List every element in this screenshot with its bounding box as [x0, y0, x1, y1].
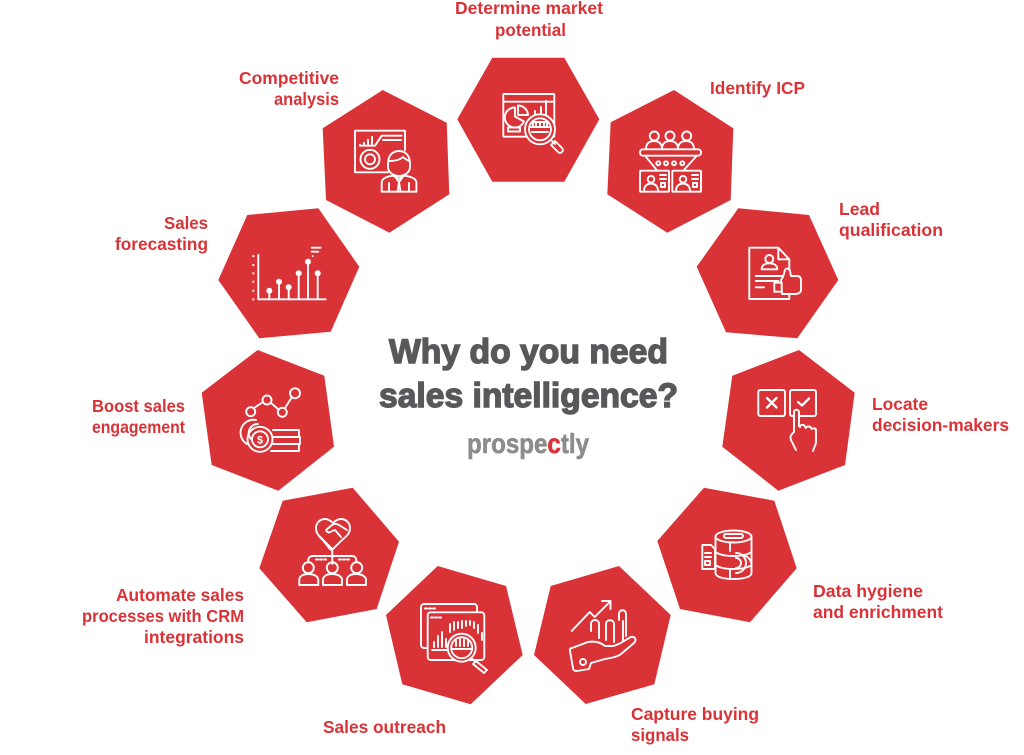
icon: hand with rising chart — [570, 601, 635, 671]
label: Identify ICP — [710, 78, 805, 98]
label: analysis — [274, 89, 339, 109]
label: integrations — [144, 627, 244, 647]
icon: document with thumbs up — [749, 248, 801, 299]
label: processes with CRM — [82, 606, 244, 626]
title — [379, 333, 678, 415]
icon: lollipop chart — [253, 248, 326, 299]
label — [813, 581, 943, 622]
label: and enrichment — [813, 602, 943, 622]
label — [631, 704, 759, 745]
label: dollar sign: $ — [257, 434, 263, 446]
hexagon — [607, 90, 733, 233]
label: Locate — [872, 394, 928, 414]
panel: Boost sales engagement — [92, 350, 334, 491]
icon: funnel with people — [640, 132, 701, 192]
label: decision-makers — [872, 415, 1009, 435]
label: signals — [631, 725, 689, 745]
hexagon — [534, 566, 671, 704]
hexagon — [259, 488, 399, 622]
hexagon — [722, 350, 855, 491]
panel: Sales outreach — [323, 566, 523, 737]
label: Data hygiene — [813, 581, 923, 601]
panel: Sales forecasting — [115, 208, 359, 338]
label — [82, 585, 244, 647]
label: Competitive — [239, 68, 339, 88]
icon: dashboard with magnifier — [503, 94, 563, 153]
logo: prospectly: prospectly — [467, 428, 589, 459]
panel: Lead qualification — [697, 199, 943, 338]
label: potential — [495, 20, 566, 40]
panel: Competitive analysis — [239, 68, 449, 233]
panel: Determine market potential — [455, 0, 603, 182]
label: qualification — [839, 220, 943, 240]
label: Capture buying — [631, 704, 759, 724]
label: Sales — [164, 213, 208, 233]
label: Sales outreach — [323, 717, 446, 737]
label — [92, 396, 185, 437]
panel: Locate decision-makers — [722, 350, 1009, 491]
label — [455, 0, 603, 40]
icon: handshake heart over team — [299, 519, 366, 585]
label — [239, 68, 339, 109]
label: Boost sales — [92, 396, 185, 416]
label — [115, 213, 208, 254]
chart dots — [266, 259, 321, 294]
icon: choice boxes with pointing hand — [758, 390, 816, 451]
hexagon — [457, 58, 599, 182]
label: engagement — [92, 417, 185, 437]
label — [839, 199, 943, 240]
hexagon — [697, 208, 838, 338]
label: Lead — [839, 199, 880, 219]
label: forecasting — [115, 234, 208, 254]
icon: growth line with coins — [241, 388, 300, 452]
title: sales intelligence? — [379, 377, 678, 415]
panel: Data hygiene and enrichment — [657, 488, 943, 622]
label: Automate sales — [116, 585, 244, 605]
panel: Identify ICP — [607, 78, 805, 233]
hexagon — [386, 566, 523, 704]
hexagon — [218, 208, 359, 338]
panel: Capture buying signals — [534, 566, 759, 745]
icon: analyst with screen — [355, 131, 416, 192]
hexagon — [657, 488, 797, 622]
title: Why do you need — [389, 333, 668, 371]
label — [872, 394, 1009, 435]
icon: analytics windows with magnifier — [421, 604, 487, 673]
icon: database with gear and document — [702, 530, 752, 579]
hexagon — [202, 350, 334, 491]
hexagon — [323, 90, 449, 233]
panel: Automate sales processes with CRM integrations — [82, 488, 399, 647]
